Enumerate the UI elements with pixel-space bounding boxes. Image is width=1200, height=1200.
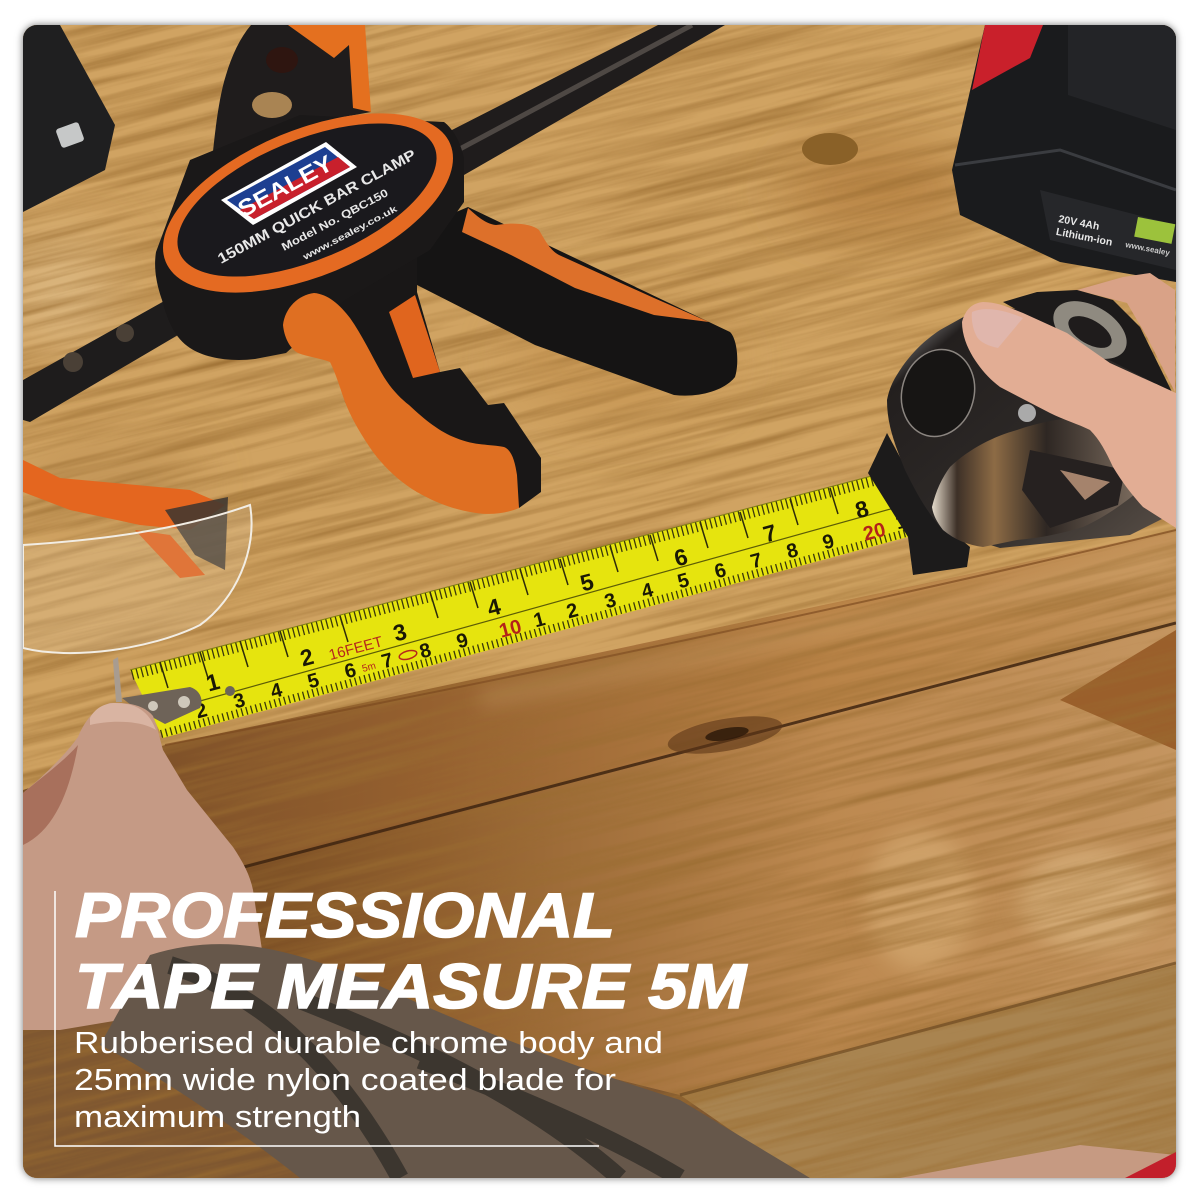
fixed handle orange grip: [462, 208, 709, 322]
clamp label text: Model No. QBC150: [280, 187, 390, 254]
Sealey logo: SEALEY: [233, 150, 337, 222]
power tool battery top right: www.sealey: [1124, 240, 1171, 258]
tape hook: [113, 657, 202, 724]
inch numbers: [203, 495, 872, 696]
case rubber top: [1003, 290, 1172, 392]
5m marking: 5m: [361, 661, 377, 675]
power tool battery top right: [952, 25, 1176, 282]
heading: TAPE MEASURE 5M: [75, 952, 748, 1022]
inch numbers: 1: [203, 668, 223, 696]
left hand and tattooed arm: [23, 703, 1176, 1178]
inch numbers: 8: [852, 495, 872, 523]
red decimetre numbers: 20: [861, 519, 888, 546]
clamp bar upper: [448, 25, 725, 175]
heading: [75, 881, 748, 1022]
quick bar clamp: [23, 25, 737, 514]
trigger frame: [326, 252, 541, 508]
16 feet marking: 16FEET: [327, 633, 385, 664]
case black base: [868, 433, 970, 575]
centimetre numbers: 7: [748, 549, 765, 573]
inner orange slider: [389, 295, 440, 378]
rivet: [225, 686, 235, 696]
centimetre numbers: 8: [417, 639, 434, 663]
fingers behind case: [1077, 273, 1175, 392]
centimetre numbers: 4: [268, 679, 286, 703]
battery label mark: [55, 121, 85, 149]
red decimetre numbers: 10: [497, 616, 524, 643]
centimetre numbers: 5: [675, 569, 692, 593]
thumb nail: [972, 309, 1023, 348]
heading: PROFESSIONAL: [75, 881, 615, 951]
inch numbers: 7: [760, 519, 779, 547]
power tool battery top right: Lithium-ion: [1055, 226, 1113, 249]
centimetre numbers: 1: [893, 510, 910, 534]
tape lock chrome: [1043, 289, 1137, 371]
fine top ticks: [132, 477, 889, 675]
Sealey logo: [221, 142, 357, 225]
centimetre numbers: [193, 510, 910, 723]
centimetre numbers: 3: [231, 689, 248, 713]
tape measure blade: [130, 472, 910, 738]
fixed handle: [409, 207, 737, 396]
centimetre numbers: 5: [305, 669, 322, 693]
fine bottom ticks: [161, 533, 906, 734]
clamp label text: 150MM QUICK BAR CLAMP: [215, 147, 419, 268]
case plate reflection: [1022, 450, 1125, 528]
centimetre numbers: 9: [454, 629, 471, 653]
thumb: [962, 302, 1176, 528]
inch numbers: 5: [577, 568, 597, 596]
case chrome plate: [932, 417, 1140, 547]
inch numbers: 2: [297, 643, 316, 671]
safety glasses: [23, 460, 252, 653]
centimetre numbers: 9: [820, 530, 837, 554]
clamp orange label ring: [163, 113, 453, 293]
upper jaw: [213, 25, 371, 150]
upper scale ticks: [160, 488, 838, 688]
battery top left: [23, 25, 115, 212]
text block frame: [55, 891, 599, 1146]
right hand: [962, 273, 1176, 528]
case screw: [1018, 404, 1036, 422]
case button: [900, 348, 976, 438]
centimetre numbers: 3: [602, 589, 619, 613]
case chrome shell: [887, 305, 1170, 548]
red decimetre numbers: [497, 519, 888, 643]
power tool battery top right: 20V 4Ah: [1057, 213, 1100, 233]
oval mark: [398, 650, 418, 660]
description text: [74, 1025, 663, 1134]
centimetre numbers: 1: [531, 608, 548, 632]
centimetre numbers: 4: [639, 579, 657, 603]
centimetre numbers: 6: [712, 559, 729, 583]
tape measure case: [868, 305, 1170, 575]
centimetre numbers: 7: [379, 649, 396, 673]
clamp bar lower: [23, 302, 177, 422]
clamp round body: [155, 115, 464, 360]
inch numbers: 4: [484, 593, 504, 621]
description text: 25mm wide nylon coated blade for: [74, 1062, 616, 1097]
bench dog hole: [802, 133, 858, 165]
trigger orange grip: [283, 293, 519, 514]
centimetre numbers: 8: [784, 539, 801, 563]
clamp label text: www.sealey.co.uk: [300, 203, 400, 262]
centimetre numbers: 2: [564, 599, 581, 623]
inch numbers: 6: [671, 543, 690, 571]
inch numbers: 3: [390, 618, 409, 646]
centimetre numbers: 2: [193, 699, 210, 723]
centimetre numbers: 6: [342, 659, 359, 683]
clamp black label: [177, 124, 437, 276]
description text: maximum strength: [74, 1099, 361, 1134]
description text: Rubberised durable chrome body and: [74, 1025, 663, 1060]
